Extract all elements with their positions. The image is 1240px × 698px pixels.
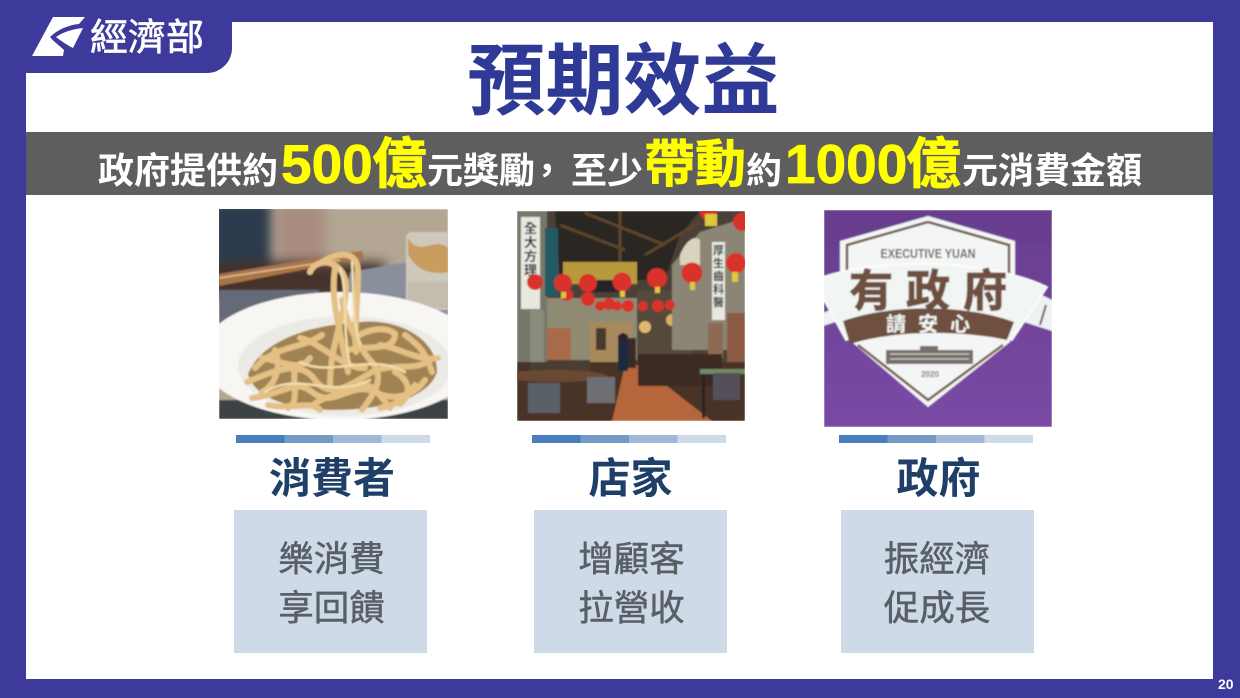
organisation name: 經濟部 <box>90 17 204 58</box>
photo: government badge: EXECUTIVE YUAN <box>880 246 976 261</box>
text box <box>234 510 427 653</box>
photo: government badge <box>823 210 1052 427</box>
headline banner: 億 <box>372 133 427 195</box>
text box: 拉營收 <box>578 588 685 628</box>
text box: 樂消費 <box>278 539 385 579</box>
photo: government badge: 2020 <box>921 370 939 379</box>
headline banner: 至少 <box>571 150 643 191</box>
photo: noodles <box>219 209 448 419</box>
ribbon tails <box>823 294 1052 331</box>
text box: 增顧客 <box>578 539 685 579</box>
page number: 20 <box>1218 676 1234 692</box>
photo: restaurant interior: 厚 <box>713 244 724 257</box>
headline banner: 帶動 <box>644 136 746 193</box>
photo: restaurant interior: 大 <box>524 235 537 250</box>
headline banner: 約 <box>746 150 782 191</box>
photo: government badge: 請安心 <box>886 312 970 336</box>
ministry logo tab <box>26 17 232 73</box>
photo: restaurant interior: 理 <box>524 263 537 278</box>
headline banner: 1000 <box>785 133 907 195</box>
headline banner <box>26 132 1213 195</box>
headline banner: 500 <box>281 133 373 195</box>
badge shield <box>840 216 1015 407</box>
text box: 促成長 <box>884 588 990 628</box>
heading: 政府 <box>896 455 981 502</box>
headline banner: 元消費金額 <box>962 150 1142 191</box>
headline banner: 政府提供約 <box>98 150 278 191</box>
icon: ministry emblem <box>32 17 85 56</box>
text box: 振經濟 <box>884 539 990 579</box>
column: government <box>839 435 1034 653</box>
photo: restaurant interior <box>517 211 745 421</box>
headline banner: ， <box>529 150 565 191</box>
photo: restaurant interior: 生 <box>713 256 724 270</box>
photo: restaurant interior: 方 <box>524 249 537 264</box>
text box <box>841 510 1034 653</box>
progress strip <box>236 435 430 443</box>
photo: restaurant interior: 齒 <box>713 269 724 283</box>
heading: 店家 <box>588 455 673 502</box>
title: 預期效益 <box>467 37 780 125</box>
text box: 享回饋 <box>278 588 385 628</box>
badge ribbon <box>823 264 1047 340</box>
photo: restaurant interior: 科 <box>713 282 724 296</box>
progress strip <box>839 435 1033 443</box>
headline banner: 元獎勵 <box>427 150 535 191</box>
photo: restaurant interior: 醫 <box>713 296 724 309</box>
photo: government badge: 有政府 <box>849 267 1007 316</box>
progress strip <box>532 435 726 443</box>
column: consumers <box>234 435 430 653</box>
photo: restaurant interior: 全 <box>524 221 537 236</box>
text box <box>534 510 727 653</box>
heading: 消費者 <box>269 455 395 502</box>
headline banner: 億 <box>906 133 961 195</box>
column: merchants <box>532 435 727 653</box>
